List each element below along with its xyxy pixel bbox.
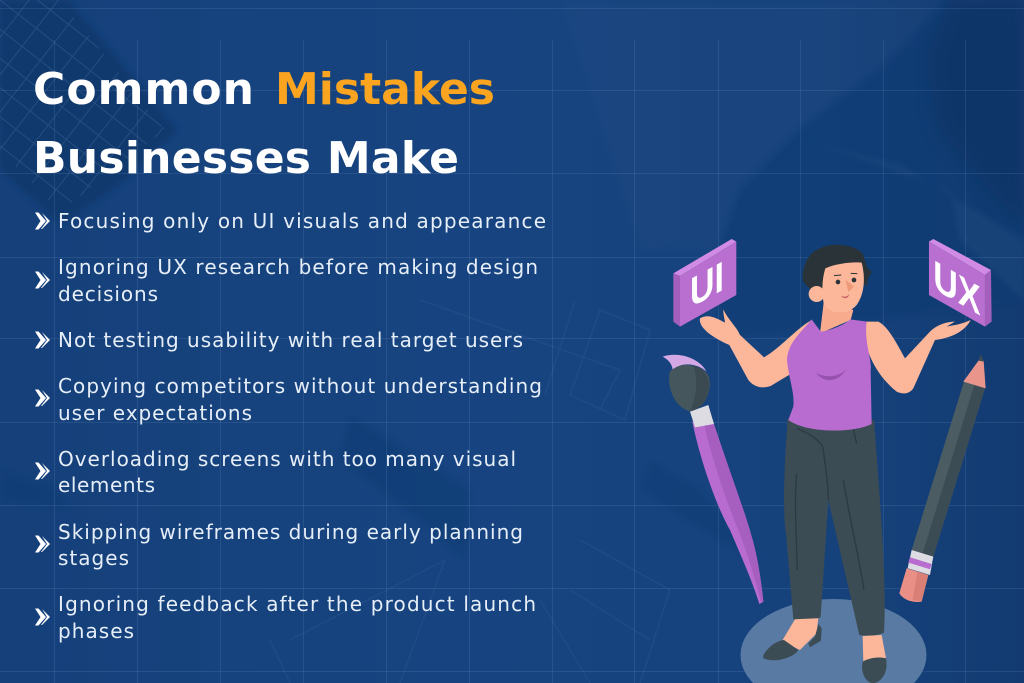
item 5: elements (58, 473, 155, 497)
item 5: Overloading screens with too many visual (58, 447, 516, 471)
face (822, 262, 864, 312)
title (33, 64, 495, 184)
ear (809, 286, 825, 302)
item 4 (35, 374, 542, 425)
item 5 (35, 447, 516, 497)
right arm and hand (864, 320, 971, 393)
item 1: Focusing only on UI visuals and appearance (58, 209, 546, 233)
tank top (787, 319, 872, 431)
illustration: woman balancing UI and UX (663, 239, 992, 683)
left arm and hand (700, 309, 812, 387)
item 4: Copying competitors without understanding (58, 374, 542, 398)
item 2: Ignoring UX research before making design (58, 255, 538, 279)
title: Businesses Make (33, 133, 459, 184)
feet and shoes (782, 618, 818, 650)
UX card: UX (933, 250, 981, 325)
UI card (673, 239, 736, 327)
icon: paint brush (663, 355, 763, 604)
woman (700, 245, 971, 683)
title: Mistakes (275, 64, 495, 115)
neck (820, 300, 853, 333)
item 6 (35, 520, 523, 570)
platform ellipse (740, 599, 926, 683)
hair (803, 245, 872, 292)
item 6: stages (58, 546, 129, 570)
item 7: phases (58, 619, 134, 643)
item 7 (35, 592, 536, 643)
legs and trousers (784, 418, 885, 636)
item 2: decisions (58, 282, 158, 306)
list of mistakes (35, 209, 546, 643)
UI card: UI (690, 253, 724, 317)
title: Common (33, 64, 254, 115)
item 4: user expectations (58, 401, 252, 425)
item 2 (35, 255, 538, 306)
item 7: Ignoring feedback after the product launch (58, 592, 536, 616)
item 6: Skipping wireframes during early planning (58, 520, 523, 544)
item 3: Not testing usability with real target users (58, 328, 523, 352)
icon: pencil (899, 354, 986, 602)
